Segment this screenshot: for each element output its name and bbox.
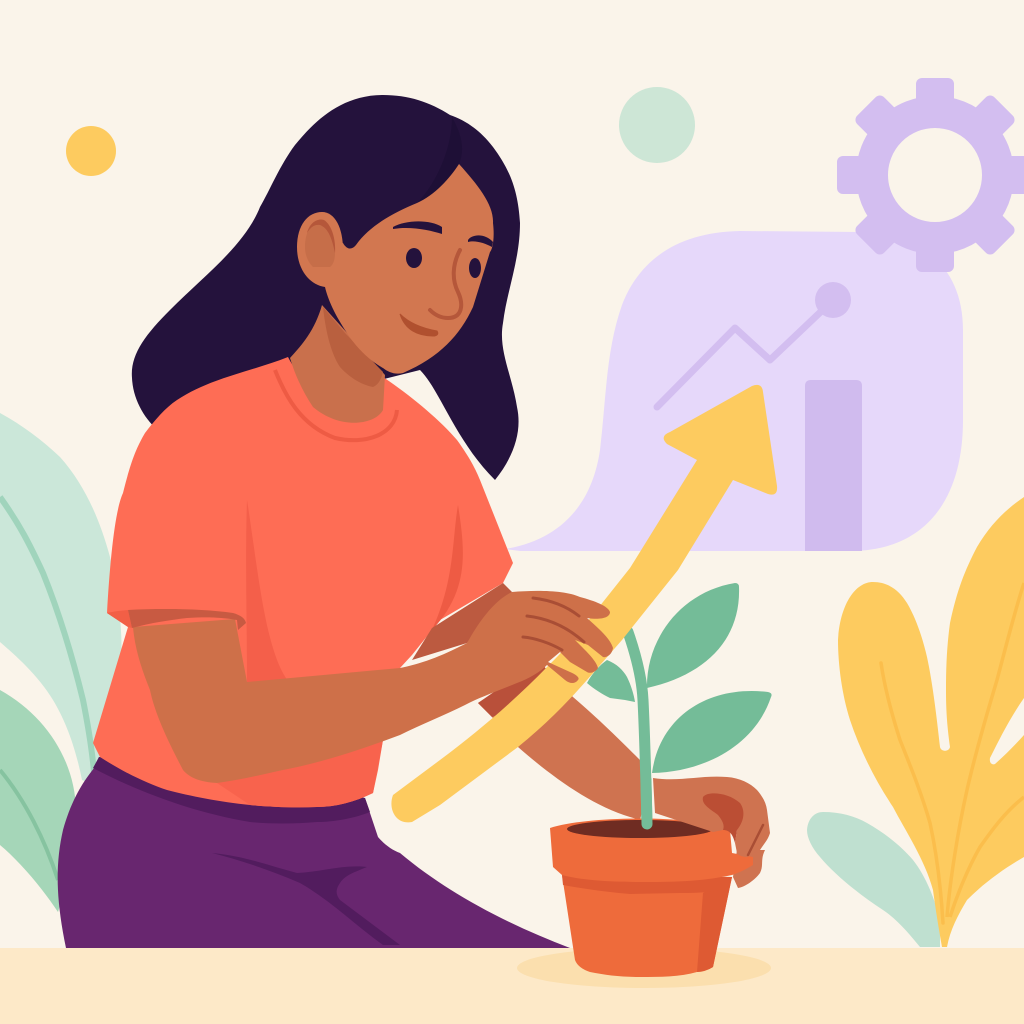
near arm and hand <box>133 591 613 783</box>
plant: left dark leaf <box>0 690 76 912</box>
nose <box>430 250 461 318</box>
plant: left light leaf <box>0 413 122 785</box>
trousers <box>58 757 570 948</box>
face <box>297 164 494 374</box>
flower pot <box>550 818 753 977</box>
sleeve cuff <box>107 609 246 630</box>
decorative circle: yellow <box>66 126 116 176</box>
table <box>0 948 1024 1024</box>
seedling stem base <box>646 780 647 824</box>
far arm <box>478 660 645 820</box>
seedling <box>587 583 772 825</box>
chart: bar <box>805 380 862 551</box>
plant: right yellow leaves <box>838 497 1024 947</box>
decorative circle: green <box>619 87 695 163</box>
chart: trend line <box>657 282 851 407</box>
hand on pot <box>653 777 770 857</box>
eyebrows <box>393 221 493 247</box>
eyes <box>406 248 422 268</box>
hair <box>132 95 520 480</box>
plant: right pale leaf <box>807 812 940 947</box>
t-shirt <box>93 357 513 807</box>
neck <box>290 305 385 423</box>
icon: gear <box>837 78 1024 272</box>
hand behind pot rim <box>733 850 765 888</box>
ear <box>297 212 343 287</box>
pot shadow <box>517 948 771 988</box>
mouth <box>400 314 438 336</box>
growth arrow <box>391 385 777 822</box>
speech bubble panel <box>505 231 963 551</box>
